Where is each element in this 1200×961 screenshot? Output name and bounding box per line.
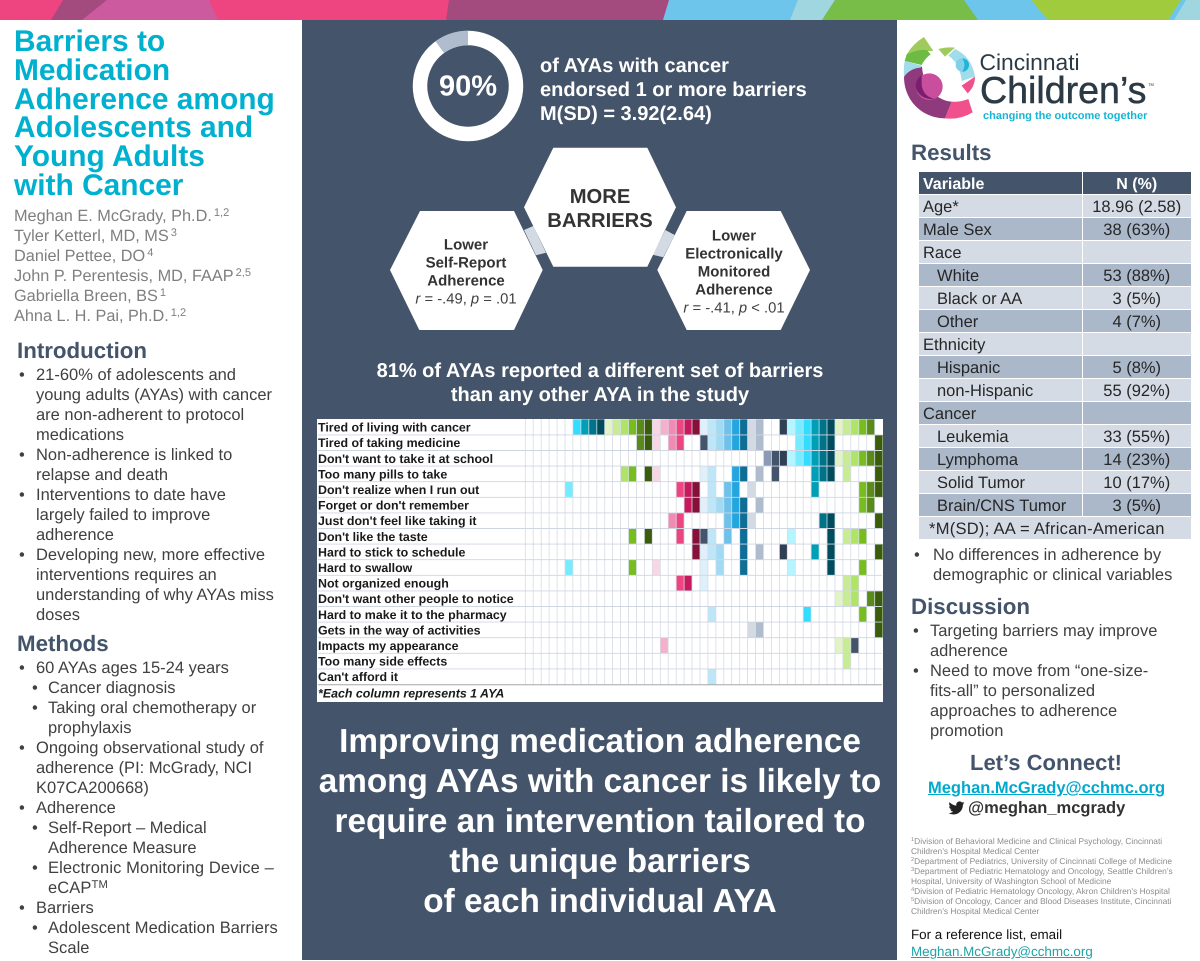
table: sample characteristics: Solid Tumor: [937, 474, 1025, 492]
methods bullets: Barriers: [36, 898, 94, 916]
heatmap row labels: [318, 421, 514, 684]
introduction bullets: understanding of why AYAs miss: [36, 586, 274, 604]
table: sample characteristics: 38 (63%): [1103, 221, 1170, 239]
author affiliations: 5Division of Oncology, Cancer and Blood Diseases Institute, Cincinnati: [911, 896, 1171, 906]
table: sample characteristics: Race: [923, 244, 962, 262]
introduction bullets: young adults (AYAs) with cancer: [36, 386, 272, 404]
methods bullets: •: [32, 818, 38, 836]
hexagon: lower electronically monitored adherence: [657, 211, 810, 330]
heading: let's connect: Let’s Connect!: [970, 750, 1122, 775]
conclusion statement: require an intervention tailored to: [334, 802, 865, 840]
discussion bullets: adherence: [930, 642, 1008, 660]
heading: introduction: Introduction: [17, 338, 147, 363]
heatmap row labels: Just don't feel like taking it: [318, 514, 477, 528]
table: sample characteristics: 33 (55%): [1103, 428, 1170, 446]
table: sample characteristics: Cancer: [923, 405, 976, 423]
methods bullets: •: [32, 858, 38, 876]
authors: Tyler Ketterl, MD, MS3: [14, 226, 177, 244]
donut caption: endorsed 1 or more barriers: [540, 79, 807, 101]
author affiliations: 1Division of Behavioral Medicine and Clinical Psychology, Cincinnati: [911, 836, 1162, 846]
heatmap row labels: Don't want other people to notice: [318, 592, 514, 606]
methods bullets: Self-Report – Medical: [48, 818, 207, 836]
methods bullets: •: [19, 738, 25, 756]
introduction bullets: •: [19, 446, 25, 464]
title: Adherence among: [14, 83, 275, 116]
reference list note: [911, 927, 1093, 959]
table: sample characteristics: 4 (7%): [1112, 313, 1161, 331]
methods bullets: Electronic Monitoring Device –: [48, 858, 274, 876]
title: Barriers to: [14, 25, 165, 58]
introduction bullets: •: [19, 486, 25, 504]
introduction bullets: relapse and death: [36, 466, 168, 484]
table: sample characteristics: 18.96 (2.58): [1092, 198, 1181, 216]
donut caption: of AYAs with cancer: [540, 55, 729, 77]
heatmap row labels: Hard to make it to the pharmacy: [318, 608, 507, 622]
table: sample characteristics: 53 (88%): [1103, 267, 1170, 285]
author affiliations: 2Department of Pediatrics, University of Cincinnati College of Medicine: [911, 856, 1172, 866]
authors: Daniel Pettee, DO4: [14, 246, 153, 264]
authors: John P. Perentesis, MD, FAAP2,5: [14, 266, 251, 284]
table: sample characteristics: Ethnicity: [923, 336, 985, 354]
reference list note: For a reference list, email: [911, 927, 1062, 942]
table: sample characteristics: *M(SD); AA = African-American: [929, 520, 1165, 538]
methods bullets: Scale: [48, 938, 90, 956]
heatmap row labels: Hard to swallow: [318, 561, 413, 575]
reference list note: Meghan.McGrady@cchmc.org: [911, 944, 1093, 959]
introduction bullets: •: [19, 546, 25, 564]
methods bullets: Adolescent Medication Barriers: [48, 918, 278, 936]
introduction bullets: [19, 366, 274, 624]
hexagon: lower self-report adherence: [390, 211, 543, 330]
table: sample characteristics: 55 (92%): [1103, 382, 1170, 400]
conclusion statement: of each individual AYA: [423, 882, 777, 920]
methods bullets: Adherence: [36, 798, 116, 816]
hexagon: lower electronically monitored adherence: Electronically: [685, 246, 783, 262]
panel: methods: [17, 631, 278, 956]
panel: introduction: [17, 338, 274, 624]
heatmap footnote: *Each column represents 1 AYA: [318, 686, 504, 700]
table: sample characteristics: Brain/CNS Tumor: [937, 497, 1066, 515]
table: sample characteristics: 3 (5%): [1112, 290, 1161, 308]
heatmap row labels: Too many pills to take: [318, 467, 447, 481]
methods bullets: adherence (PI: McGrady, NCI: [36, 758, 252, 776]
methods bullets: •: [32, 918, 38, 936]
logo wordmark: Children’s: [980, 69, 1146, 111]
title: Young Adults: [14, 140, 205, 173]
author affiliations: 3Department of Pediatric Hematology and Oncology, Seattle Children’s: [911, 866, 1173, 876]
heatmap row labels: Don't realize when I run out: [318, 483, 479, 497]
conclusion statement: [319, 722, 881, 920]
heatmap row labels: Tired of living with cancer: [318, 421, 471, 435]
discussion bullets: fits-all” to personalized: [930, 682, 1095, 700]
hexagon: lower electronically monitored adherence: Lower: [712, 228, 756, 244]
hexagon: more barriers: MORE: [570, 186, 630, 208]
authors: Meghan E. McGrady, Ph.D.1,2: [14, 206, 229, 224]
table: sample characteristics: N (%): [1116, 176, 1157, 193]
methods bullets: eCAPTM: [48, 878, 108, 896]
methods bullets: prophylaxis: [48, 718, 131, 736]
discussion bullets: •: [913, 662, 919, 680]
discussion bullets: •: [913, 622, 919, 640]
icon: twitter bird: [948, 801, 964, 814]
methods bullets: •: [32, 698, 38, 716]
heatmap row labels: Not organized enough: [318, 577, 449, 591]
discussion bullets: Targeting barriers may improve: [930, 622, 1157, 640]
methods bullets: Cancer diagnosis: [48, 678, 176, 696]
methods bullets: Adherence Measure: [48, 838, 197, 856]
heatmap row labels: Don't like the taste: [318, 530, 428, 544]
hexagon diagram: barriers and adherence: [390, 148, 810, 330]
heading: heatmap finding: than any other AYA in the study: [451, 384, 749, 406]
table: sample characteristics: Male Sex: [923, 221, 992, 239]
logo wordmark: [980, 49, 1154, 122]
discussion bullets: promotion: [930, 722, 1003, 740]
heatmap row labels: Tired of taking medicine: [318, 436, 460, 450]
results note: demographic or clinical variables: [933, 566, 1172, 584]
conclusion statement: among AYAs with cancer is likely to: [319, 762, 881, 800]
hexagon: lower self-report adherence: Lower: [444, 236, 488, 254]
logo wordmark: TM: [1148, 82, 1154, 87]
title: with Cancer: [14, 169, 183, 202]
title: [14, 25, 275, 202]
table: sample characteristics: [919, 172, 1191, 539]
introduction bullets: medications: [36, 426, 124, 444]
introduction bullets: Interventions to date have: [36, 486, 226, 504]
author affiliations: 4Division of Pediatric Hematology Oncology, Akron Children’s Hospital: [911, 886, 1170, 896]
author affiliations: [911, 836, 1173, 916]
conclusion statement: Improving medication adherence: [339, 722, 861, 760]
top colour banner: [0, 0, 1200, 20]
logo: Cincinnati Children's: [904, 37, 1154, 122]
introduction bullets: are non-adherent to protocol: [36, 406, 244, 424]
donut caption: M(SD) = 3.92(2.64): [540, 103, 712, 125]
authors: Ahna L. H. Pai, Ph.D.1,2: [14, 306, 186, 324]
introduction bullets: interventions requires an: [36, 566, 217, 584]
logo wordmark: changing the outcome together: [983, 110, 1148, 122]
methods bullets: 60 AYAs ages 15-24 years: [36, 658, 229, 676]
heatmap row labels: Impacts my appearance: [318, 639, 459, 653]
methods bullets: Taking oral chemotherapy or: [48, 698, 256, 716]
methods bullets: •: [19, 658, 25, 676]
introduction bullets: adherence: [36, 526, 114, 544]
introduction bullets: doses: [36, 606, 80, 624]
heatmap row labels: Hard to stick to schedule: [318, 545, 465, 559]
heading: methods: Methods: [17, 631, 109, 656]
table: sample characteristics: 5 (8%): [1112, 359, 1161, 377]
heatmap row labels: Don't want to take it at school: [318, 452, 493, 466]
heatmap row labels: Gets in the way of activities: [318, 623, 481, 637]
table: sample characteristics: Black or AA: [937, 290, 1022, 308]
hexagon: more barriers: BARRIERS: [547, 210, 653, 232]
results note: No differences in adherence by: [933, 546, 1161, 564]
methods bullets: •: [19, 898, 25, 916]
table: sample characteristics: White: [937, 267, 979, 285]
hexagon: lower electronically monitored adherence: Monitored: [698, 264, 770, 280]
heading: discussion: Discussion: [911, 594, 1030, 619]
author affiliations: Hospital, University of Washington School of Medicine: [911, 876, 1111, 886]
methods bullets: Ongoing observational study of: [36, 738, 263, 756]
heatmap row labels: Forget or don't remember: [318, 499, 469, 513]
methods bullets: •: [32, 678, 38, 696]
author affiliations: Children’s Hospital Medical Center: [911, 906, 1039, 916]
authors: [14, 206, 251, 324]
conclusion statement: the unique barriers: [449, 842, 751, 880]
heatmap row labels: Can't afford it: [318, 670, 398, 684]
discussion bullets: Need to move from “one-size-: [930, 662, 1148, 680]
table: sample characteristics: Leukemia: [937, 428, 1009, 446]
results note: [914, 546, 1172, 584]
hexagon: more barriers: [524, 148, 676, 267]
results note: •: [914, 546, 920, 564]
introduction bullets: 21-60% of adolescents and: [36, 366, 236, 384]
table: sample characteristics: Hispanic: [937, 359, 1000, 377]
heatmap: barriers by participant: [317, 419, 883, 702]
heading: heatmap finding: 81% of AYAs reported a different set of barriers: [377, 360, 823, 382]
logo wordmark: Cincinnati: [980, 49, 1080, 75]
panel: central findings: [302, 20, 897, 960]
panel: title and authors: [14, 25, 275, 324]
heading: results: Results: [911, 140, 992, 164]
donut chart: 90%: 90%: [439, 70, 497, 102]
donut chart: 90%: [412, 30, 524, 142]
table: sample characteristics: 14 (23%): [1103, 451, 1170, 469]
methods bullets: •: [19, 798, 25, 816]
introduction bullets: Non-adherence is linked to: [36, 446, 232, 464]
heading: heatmap finding: [377, 360, 823, 406]
twitter handle: @meghan_mcgrady: [968, 799, 1125, 817]
author affiliations: Children’s Hospital Medical Center: [911, 846, 1039, 856]
table: sample characteristics: non-Hispanic: [937, 382, 1033, 400]
authors: Gabriella Breen, BS1: [14, 286, 166, 304]
heatmap cells: [565, 419, 883, 684]
title: Adolescents and: [14, 111, 253, 144]
table: sample characteristics: Variable: [923, 176, 984, 193]
table: sample characteristics: Lymphoma: [937, 451, 1018, 469]
contact block: [928, 750, 1165, 817]
table: sample characteristics: Other: [937, 313, 978, 331]
introduction bullets: Developing new, more effective: [36, 546, 265, 564]
donut caption: [540, 55, 807, 125]
table: sample characteristics: 10 (17%): [1103, 474, 1170, 492]
table: sample characteristics: 3 (5%): [1112, 497, 1161, 515]
hexagon: lower electronically monitored adherence: Adherence: [695, 282, 773, 298]
logo mark: [904, 37, 975, 119]
introduction bullets: largely failed to improve: [36, 506, 210, 524]
methods bullets: K07CA200668): [36, 778, 149, 796]
heatmap row labels: Too many side effects: [318, 655, 447, 669]
discussion bullets: [913, 622, 1157, 740]
hexagon: lower electronically monitored adherence: r = -.41, p < .01: [683, 300, 785, 316]
table: sample characteristics: Age*: [923, 198, 959, 216]
hexagon: lower self-report adherence: Self-Report: [426, 254, 506, 272]
hexagon: lower self-report adherence: Adherence: [427, 272, 505, 290]
discussion bullets: approaches to adherence: [930, 702, 1117, 720]
contact email: Meghan.McGrady@cchmc.org: [928, 779, 1165, 797]
title: Medication: [14, 54, 170, 87]
methods bullets: [19, 658, 278, 956]
introduction bullets: •: [19, 366, 25, 384]
hexagon: lower self-report adherence: r = -.49, p = .01: [415, 292, 517, 308]
